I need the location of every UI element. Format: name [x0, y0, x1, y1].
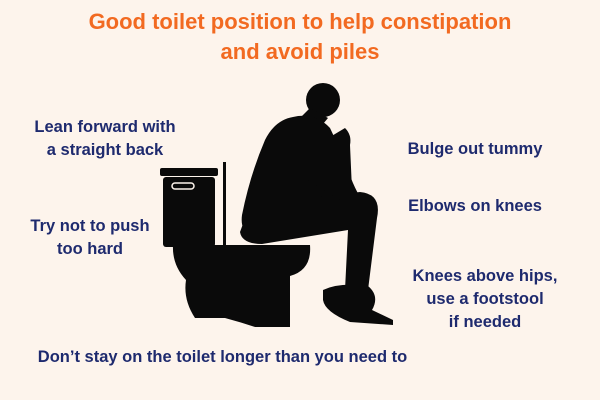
text: don't stay: Don’t stay on the toilet longer than you need to	[38, 348, 407, 366]
title: and avoid piles	[221, 39, 379, 64]
text: lean forward	[34, 118, 176, 159]
text: knees above hips: Knees above hips,	[413, 267, 557, 285]
text: bulge out tummy: Bulge out tummy	[408, 140, 542, 158]
text: try not to push: too hard	[57, 240, 123, 258]
title	[89, 9, 511, 64]
person	[240, 83, 393, 325]
title: Good toilet position to help constipation	[89, 9, 511, 34]
text: knees above hips: use a footstool	[426, 290, 544, 308]
text: knees above hips	[413, 267, 557, 331]
toilet bowl	[173, 245, 310, 327]
text: try not to push: Try not to push	[30, 217, 150, 235]
text: elbows on knees: Elbows on knees	[408, 197, 542, 215]
text: lean forward: a straight back	[47, 141, 163, 159]
text: lean forward: Lean forward with	[34, 118, 176, 136]
text: knees above hips: if needed	[449, 313, 521, 331]
toilet tank	[160, 162, 226, 252]
text: try not to push	[30, 217, 150, 258]
